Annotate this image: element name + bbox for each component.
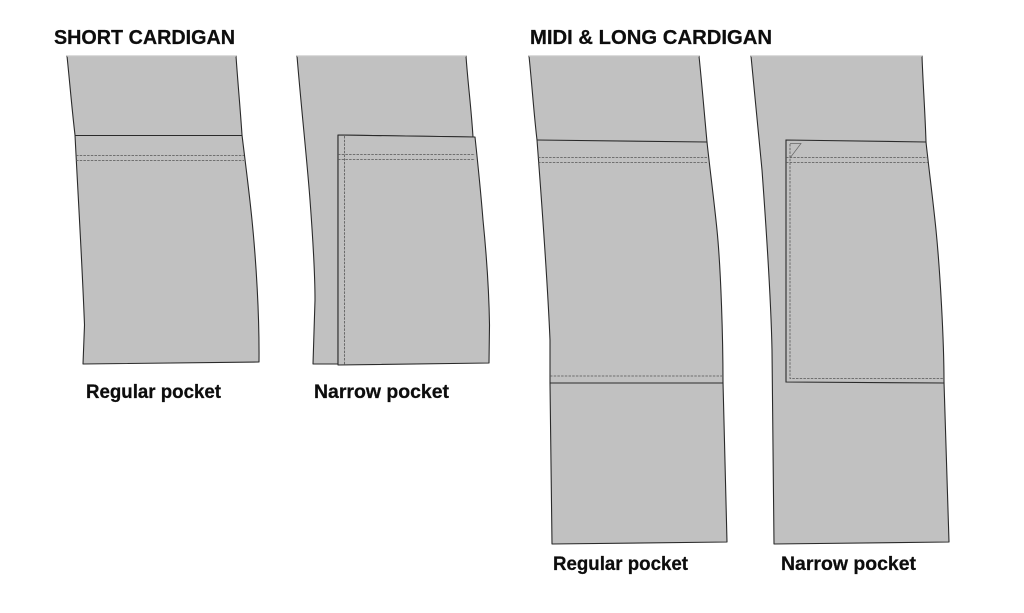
pocket: narrow outline [786,140,944,383]
label: midi regular pocket: Regular pocket [553,554,689,575]
garment: long cardigan narrow pocket [751,56,949,544]
label: short regular pocket: Regular pocket [86,382,222,403]
label: long narrow pocket: Narrow pocket [781,554,917,575]
garment: short cardigan narrow pocket [297,56,490,365]
garment: midi cardigan regular pocket [529,56,727,544]
label: short narrow pocket: Narrow pocket [314,382,450,403]
pocket corner fold [790,144,801,158]
heading: midi and long cardigan: MIDI & LONG CARDIGAN [530,27,772,49]
garment: short cardigan regular pocket [67,56,259,364]
heading: short cardigan: SHORT CARDIGAN [54,27,235,49]
pocket: narrow overlay [338,135,490,365]
